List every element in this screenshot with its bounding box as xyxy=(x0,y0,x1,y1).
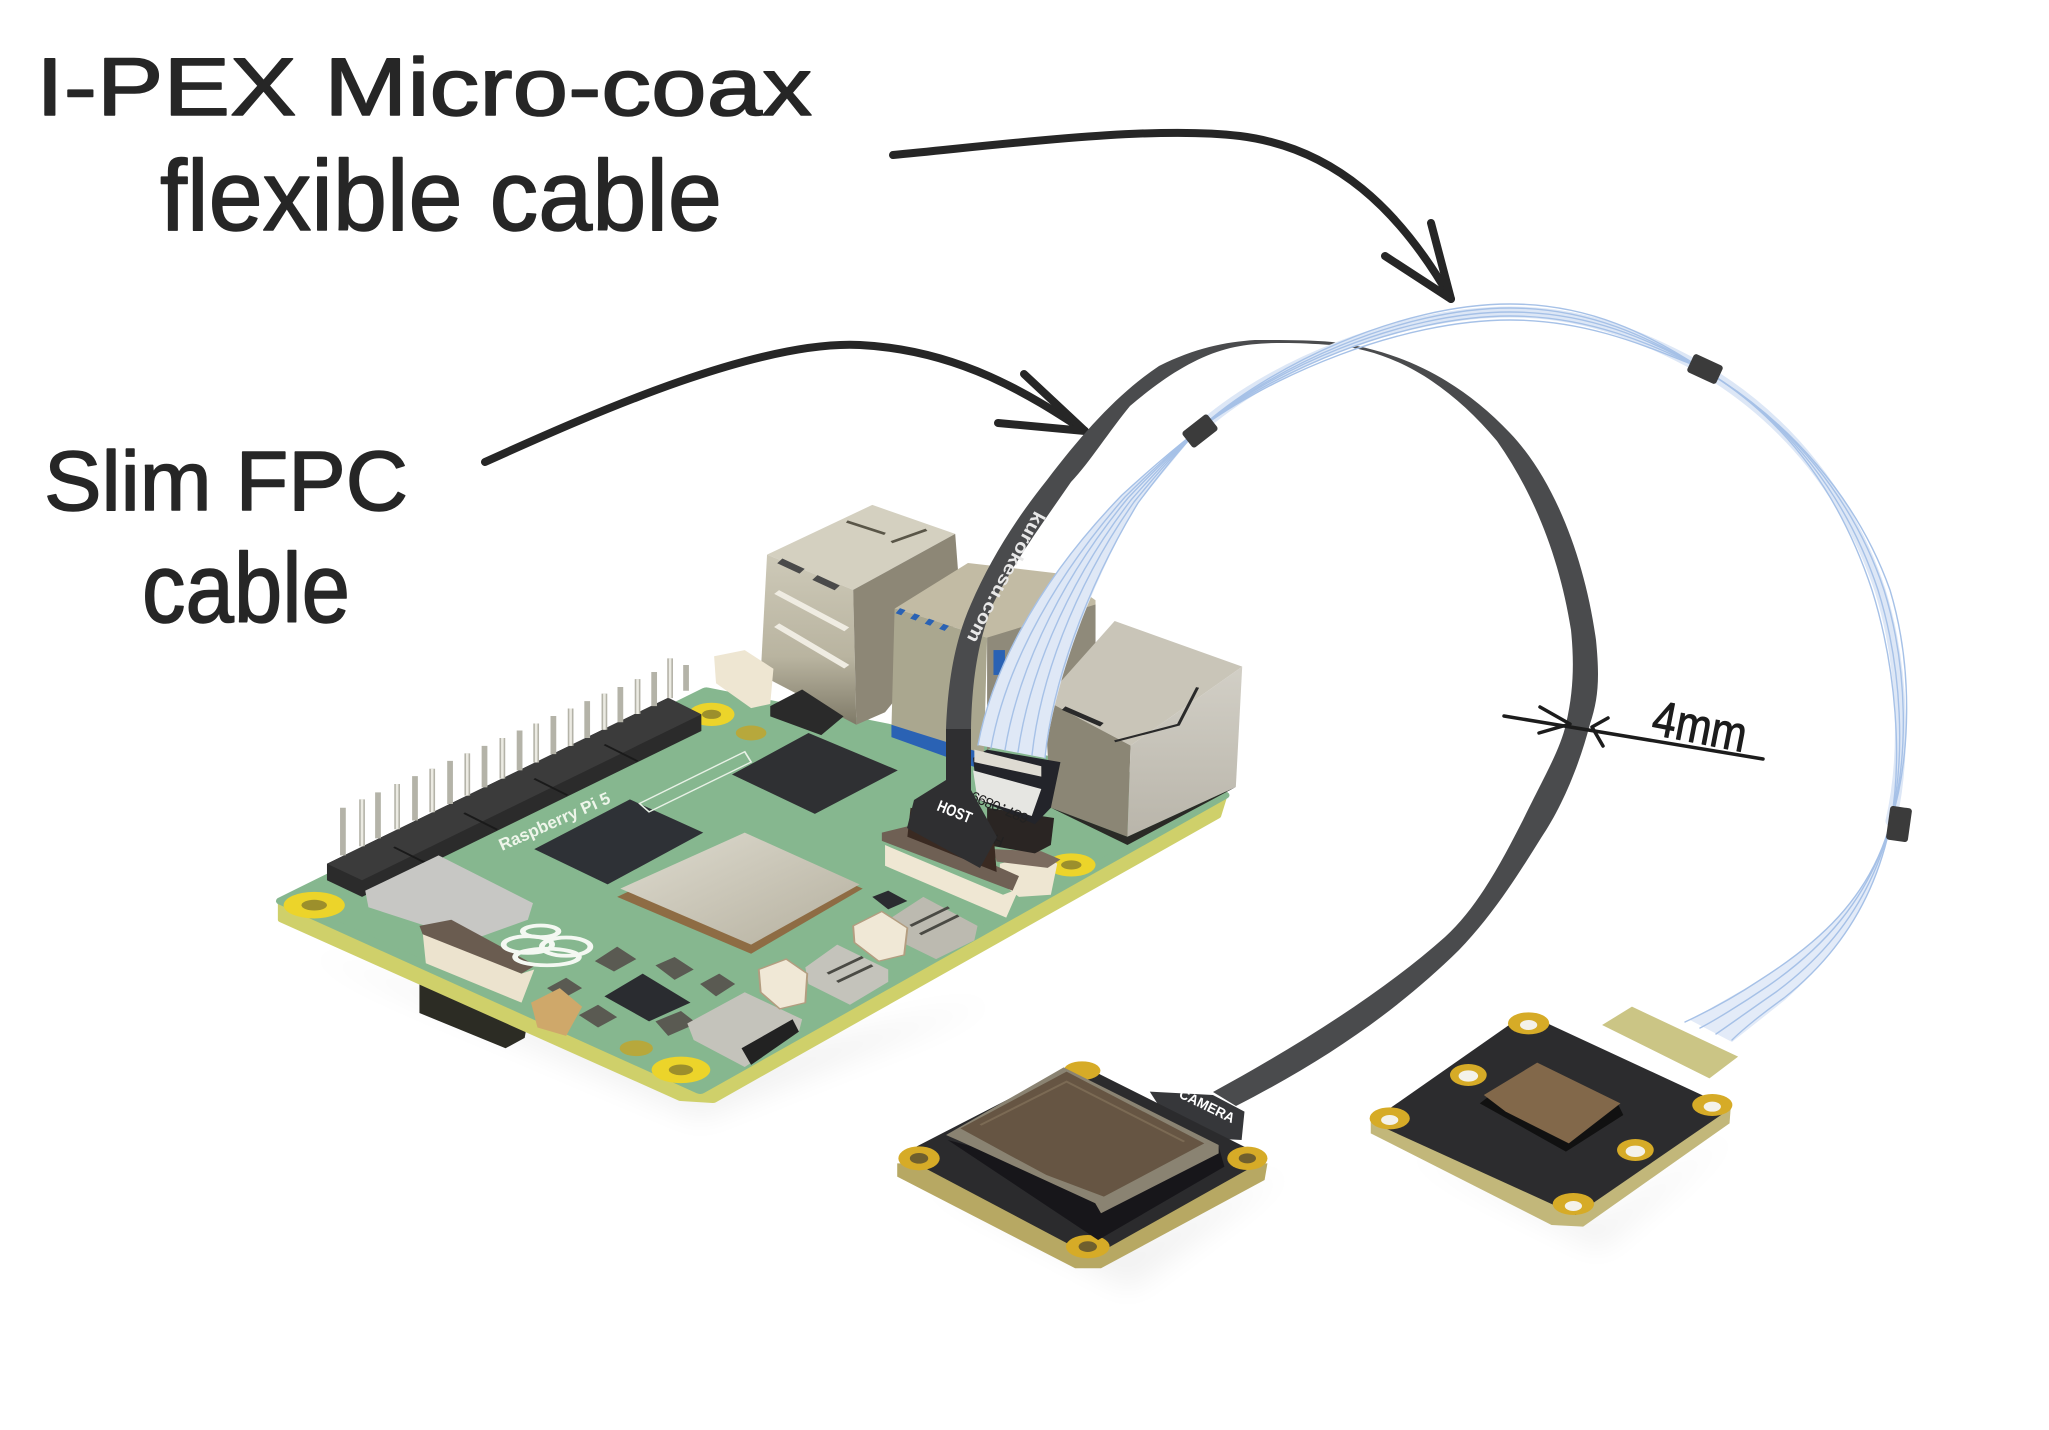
heading: Slim FPC cable: cable xyxy=(142,533,350,643)
USB port stack right xyxy=(891,563,1096,770)
sensor stack xyxy=(948,1140,1224,1240)
PCB edge xyxy=(282,795,1223,1100)
PCB top xyxy=(900,1063,1267,1257)
SoC metal lid xyxy=(617,833,863,954)
4mm dimension marker xyxy=(1504,690,1763,763)
sensor glass lid xyxy=(946,1067,1219,1213)
pale wire bundle base xyxy=(978,312,1900,1042)
arrow: to slim FPC cable xyxy=(485,345,1085,462)
JST connectors xyxy=(759,911,907,1009)
FPC camera tab xyxy=(1150,1092,1244,1140)
coax board label xyxy=(964,786,1032,850)
small chip xyxy=(872,891,907,909)
blue wires xyxy=(978,304,1907,1040)
heading: I-PEX Micro-coax flexible cable xyxy=(36,42,812,252)
RP1 chip xyxy=(732,733,898,814)
heading: I-PEX Micro-coax flexible cable: flexible cable xyxy=(160,140,722,252)
USB port stack left xyxy=(761,505,962,725)
sensor window xyxy=(1484,1063,1620,1143)
4mm label: 4mm xyxy=(1648,690,1752,763)
GPIO header xyxy=(327,658,701,897)
HOST end tab xyxy=(907,729,997,868)
fan connector xyxy=(714,650,773,708)
PCB top xyxy=(1371,1013,1731,1215)
HOST label: HOST xyxy=(935,798,974,827)
tan micro-coax connector xyxy=(1602,1007,1738,1078)
silkscreen label xyxy=(639,752,751,812)
PCB top face xyxy=(282,692,1223,1090)
sensor tinted window xyxy=(960,1072,1204,1197)
brand label on cable: kurokesu.com xyxy=(963,508,1049,646)
mounting holes xyxy=(284,703,1096,1083)
board silkscreen text: Raspberry Pi 5 xyxy=(496,788,613,855)
PCB edge xyxy=(1371,1108,1731,1227)
power management chip xyxy=(547,947,735,1036)
drop shadows xyxy=(300,950,1740,1290)
small black connector xyxy=(770,689,844,735)
RAM chip xyxy=(534,799,703,884)
arrow: to micro-coax cable xyxy=(893,133,1451,299)
CSI connectors on board xyxy=(882,826,1060,918)
sensor xyxy=(1480,1097,1623,1152)
ethernet jack xyxy=(1044,621,1242,845)
Raspberry Pi 5 board xyxy=(282,505,1242,1100)
mounting pads xyxy=(1370,1012,1732,1215)
CAMERA label: CAMERA xyxy=(1177,1085,1238,1126)
heading: Slim FPC cable xyxy=(44,434,408,643)
mounting pads xyxy=(898,1061,1267,1258)
slim FPC cable xyxy=(907,340,1598,1106)
cable clip 1 xyxy=(1181,413,1219,449)
power button xyxy=(531,988,582,1036)
raspberry logo xyxy=(504,925,590,965)
coax adapter board xyxy=(973,750,1060,853)
micro HDMI connectors xyxy=(805,897,978,1005)
cable clip 3 xyxy=(1886,806,1912,842)
brown FPC stiffener xyxy=(907,808,997,872)
heading: I-PEX Micro-coax flexible cable: I-PEX Micro-coax xyxy=(36,42,812,133)
camera module with small sensor xyxy=(1370,1007,1738,1227)
micro-coax cable xyxy=(978,304,1912,1042)
micro SD card xyxy=(419,978,528,1048)
PCB edge xyxy=(897,1163,1267,1268)
USB-C connector xyxy=(687,992,802,1067)
coax board label: 687.0899 xyxy=(968,786,1032,826)
display connector xyxy=(419,920,536,1003)
camera module with large sensor xyxy=(897,1061,1267,1268)
coax board label: HOST xyxy=(964,820,1006,850)
wireless metal can xyxy=(365,855,533,940)
heading: Slim FPC cable: Slim FPC xyxy=(44,434,408,528)
cable clip 2 xyxy=(1686,353,1724,385)
